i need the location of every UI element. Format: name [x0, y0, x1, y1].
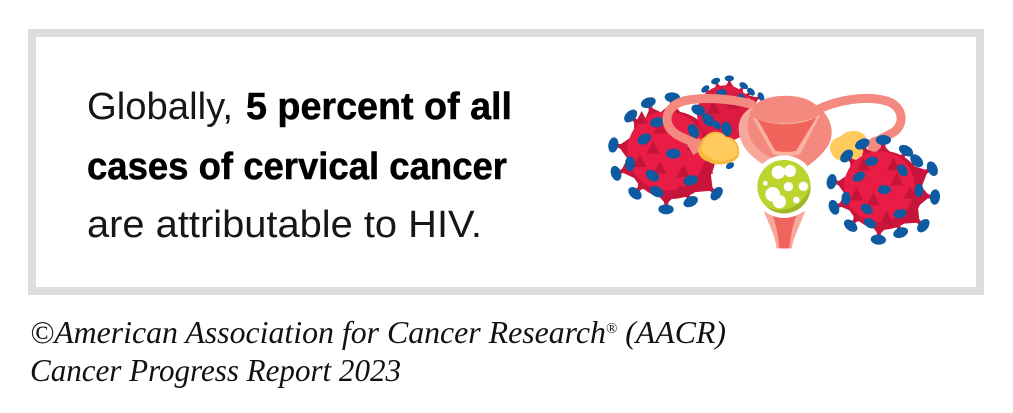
text block: copyright credit: Cancer Progress Report 2023	[30, 352, 401, 388]
icon: right ovary	[830, 131, 885, 161]
icon: vaginal canal	[764, 212, 805, 248]
text block: main statement: 5 percent of all	[246, 86, 512, 128]
text block: main statement	[87, 86, 512, 246]
icon: back virus	[685, 75, 767, 170]
icon: left ovary	[687, 132, 739, 164]
text block: main statement: Globally,	[87, 86, 233, 128]
icon: left fallopian tube	[667, 98, 752, 145]
icon: right virus	[825, 134, 942, 246]
illustration: viruses and uterus	[606, 75, 942, 248]
panel: grey framed box	[32, 33, 980, 291]
text block: main statement: are attributable to HIV.	[87, 204, 482, 246]
text block: copyright credit: ®	[606, 321, 617, 337]
icon: right fallopian tube	[817, 98, 901, 145]
text block: copyright credit: (AACR)	[617, 314, 726, 350]
icon: green cervix with abnormal cells	[753, 155, 815, 218]
text block: copyright credit: ©American Association for Cancer Research	[30, 314, 609, 350]
icon: uterus body	[739, 96, 832, 167]
text block: main statement: cases of cervical cancer	[87, 146, 507, 188]
text block: copyright credit	[30, 314, 726, 388]
icon: left virus	[606, 92, 728, 215]
